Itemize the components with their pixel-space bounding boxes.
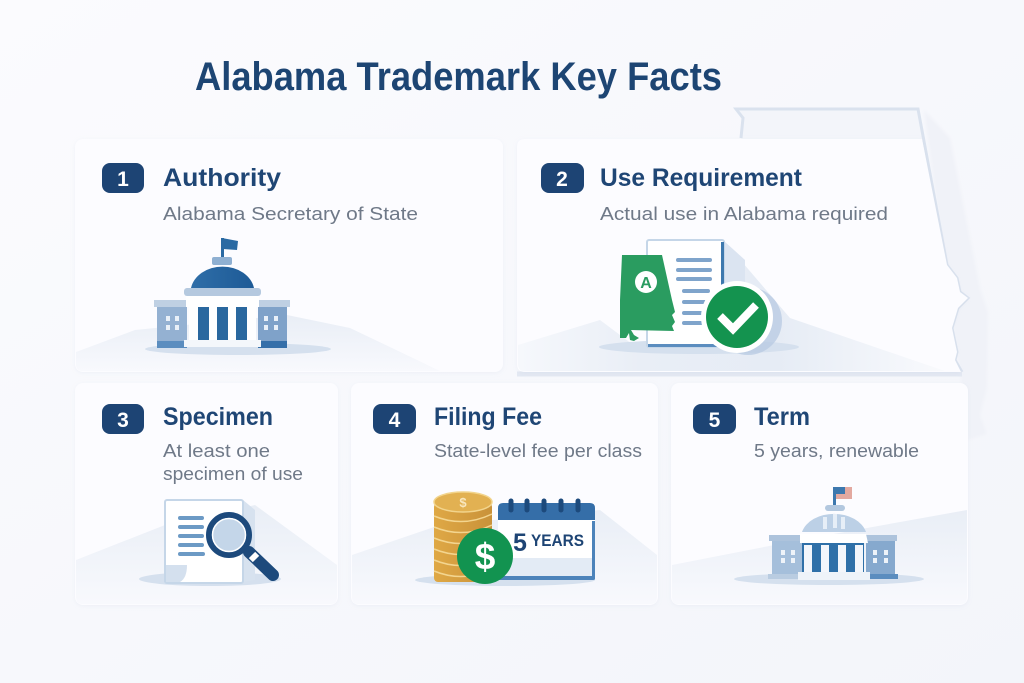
number badge 2 xyxy=(541,163,584,193)
number badge 4: 4 xyxy=(389,409,401,432)
icon: coins and calendar: YEARS xyxy=(531,531,584,550)
text: specimen detail xyxy=(163,441,303,484)
panel: term xyxy=(671,383,968,605)
panel: use requirement xyxy=(517,139,968,372)
number badge 3: 3 xyxy=(117,409,129,432)
icon: coins and calendar: $ xyxy=(459,495,467,510)
background: Alabama state outline xyxy=(517,109,988,440)
text: filing fee detail: State-level fee per class xyxy=(434,441,642,461)
panel: specimen xyxy=(75,383,338,605)
icon: coins and calendar xyxy=(415,492,595,586)
icon: Alabama document with check xyxy=(599,240,799,355)
number badge 5 xyxy=(693,404,736,434)
text: authority detail: Alabama Secretary of State xyxy=(163,204,418,224)
heading: specimen: Specimen xyxy=(163,403,273,431)
number badge 4 xyxy=(373,404,416,434)
icon: coins and calendar: $ xyxy=(475,536,496,577)
number badge 2: 2 xyxy=(556,168,568,191)
heading: term: Term xyxy=(754,403,810,431)
number badge 1: 1 xyxy=(117,168,129,191)
icon: Alabama document with check: A xyxy=(640,275,652,292)
heading: use requirement: Use Requirement xyxy=(600,164,803,192)
title: Alabama Trademark Key Facts xyxy=(195,55,722,99)
heading: authority: Authority xyxy=(163,164,281,192)
number badge 1 xyxy=(102,163,144,193)
panel: authority xyxy=(75,139,503,372)
panel: filing fee xyxy=(351,383,658,605)
icon: coins and calendar: 5 xyxy=(513,529,527,557)
text: use requirement detail: Actual use in Alabama required xyxy=(600,204,888,224)
text: term detail: 5 years, renewable xyxy=(754,441,919,461)
icon: capitol with US flag xyxy=(734,487,924,585)
icon: document with magnifier xyxy=(139,500,281,586)
heading: filing fee: Filing Fee xyxy=(434,403,542,431)
text: specimen detail: At least one xyxy=(163,441,270,461)
text: specimen detail: specimen of use xyxy=(163,464,303,484)
icon: capitol building xyxy=(145,238,331,355)
number badge 3 xyxy=(102,404,144,434)
number badge 5: 5 xyxy=(709,409,721,432)
